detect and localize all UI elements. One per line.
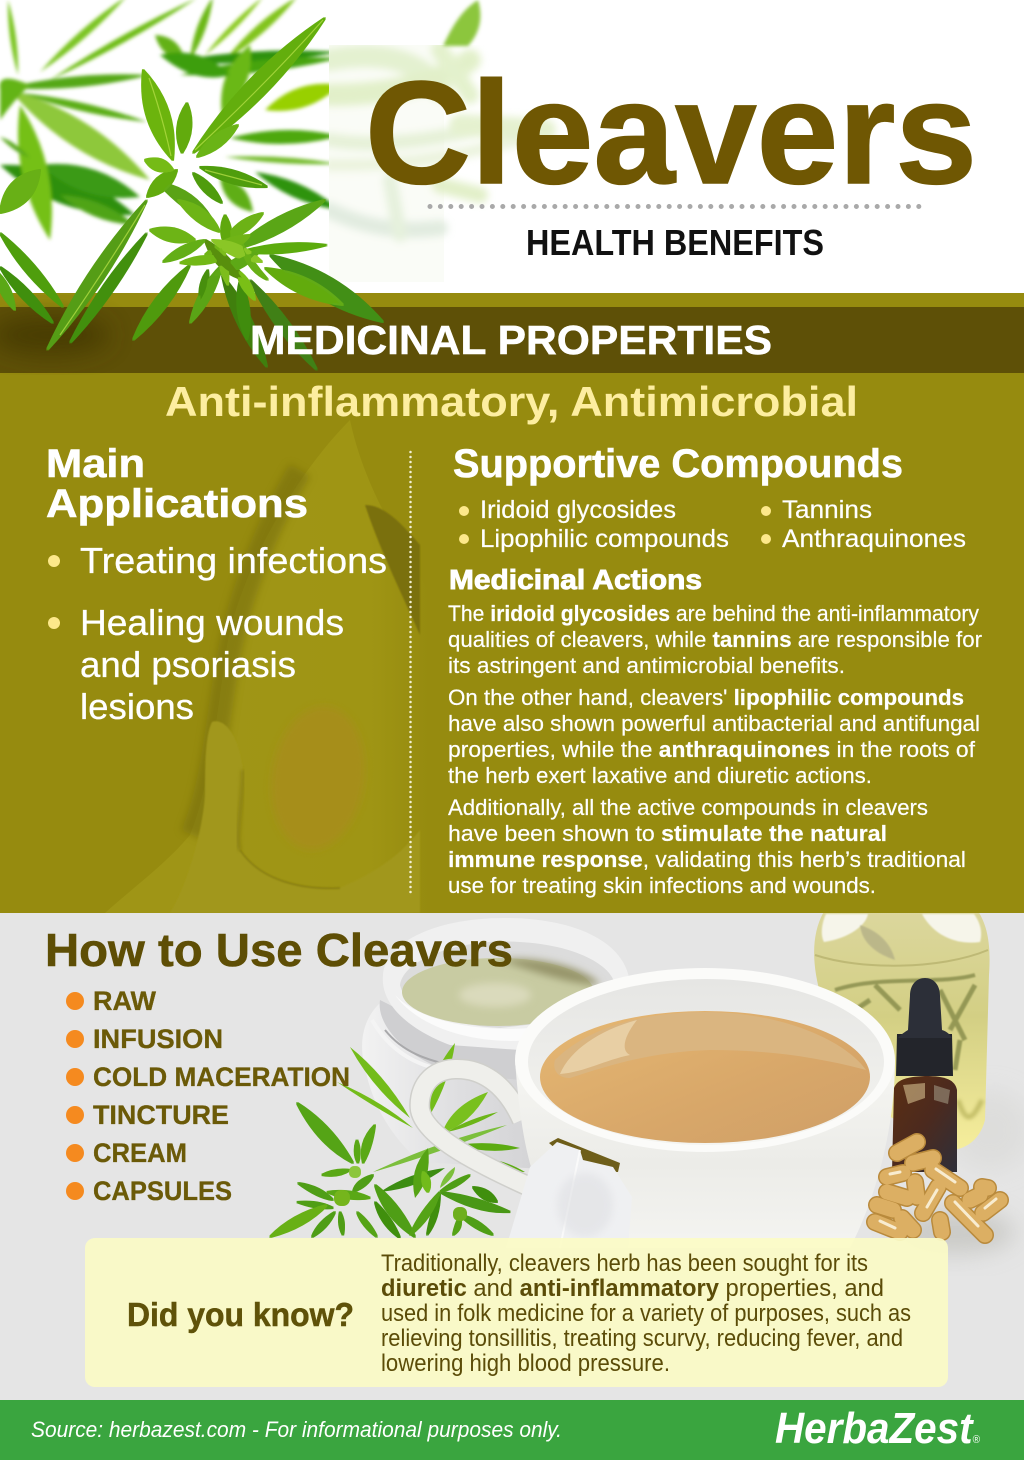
image: cleavers herb xyxy=(0,0,480,370)
image: dropper bottle xyxy=(892,978,957,1172)
item: capsules: CAPSULES xyxy=(93,1176,232,1206)
footer source: Source: herbazest.com - For informational purposes only. xyxy=(31,1417,562,1442)
callout text xyxy=(381,1250,911,1377)
bullet: treating infections: Treating infections xyxy=(80,540,387,581)
callout: did you know xyxy=(85,1238,948,1387)
paragraph: iridoid and tannins: The iridoid glycosides are behind the anti-inflammatory xyxy=(448,601,980,626)
long thin leaves behind handle xyxy=(337,1043,525,1198)
image: tea cup xyxy=(420,968,895,1248)
paragraph: iridoid and tannins xyxy=(448,601,982,678)
paragraph: immune response xyxy=(448,795,966,898)
paragraph: lipophilic and anthraquinones: properties, while the anthraquinones in the roots of xyxy=(448,737,976,762)
compound list: Lipophilic compounds xyxy=(480,525,729,553)
subheading: anti-inflammatory, antimicrobial: Anti-inflammatory, Antimicrobial xyxy=(165,378,858,425)
heading: supportive compounds: Supportive Compounds xyxy=(453,442,903,486)
tea liquid xyxy=(540,1011,870,1143)
right sprig xyxy=(410,1172,510,1235)
item: tincture: TINCTURE xyxy=(93,1100,229,1130)
blurred background leaves xyxy=(0,0,340,240)
capsule highlights xyxy=(880,1169,996,1228)
capsule outlines xyxy=(875,1142,1000,1235)
callout text: Traditionally, cleavers herb has been sought for its xyxy=(381,1250,868,1277)
callout text: lowering high blood pressure. xyxy=(381,1350,670,1377)
paragraph: iridoid and tannins: its astringent and antimicrobial benefits. xyxy=(448,653,845,678)
compound list xyxy=(459,496,966,553)
image: capsules xyxy=(875,1142,1015,1254)
paragraph: lipophilic and anthraquinones: the herb exert laxative and diuretic actions. xyxy=(448,763,872,788)
item: raw xyxy=(66,986,157,1016)
panel: supportive compounds xyxy=(448,442,982,898)
bullet: healing wounds: lesions xyxy=(80,686,194,727)
title: Cleavers: Cleavers xyxy=(365,51,977,214)
dotted divider xyxy=(430,204,920,209)
left sprig xyxy=(270,1103,415,1238)
callout text: used in folk medicine for a variety of purposes, such as xyxy=(381,1300,911,1327)
cup handle xyxy=(420,1069,530,1187)
paragraph: immune response: immune response, validating this herb’s traditional xyxy=(448,847,966,872)
grey section background xyxy=(0,913,1024,1400)
footer logo: HerbaZest: HerbaZest® xyxy=(775,1404,981,1453)
image: bottom herb sprigs xyxy=(270,1043,525,1238)
sharp foreground leaves xyxy=(0,18,383,370)
heading: main applications xyxy=(46,442,308,526)
panel: main applications xyxy=(46,442,387,727)
cup rim xyxy=(515,968,895,1152)
heading: how to use cleavers: How to Use Cleavers xyxy=(45,924,513,976)
heading: main applications: Applications xyxy=(46,482,308,526)
paragraph: iridoid and tannins: qualities of cleavers, while tannins are responsible for xyxy=(448,627,982,652)
cup body xyxy=(515,1060,895,1248)
band: medicinal properties background xyxy=(0,307,1024,373)
compound list: Tannins xyxy=(782,496,872,524)
callout text: diuretic and anti-inflammatory properties, and xyxy=(381,1275,884,1302)
tea bag xyxy=(506,1138,632,1248)
compound list: Anthraquinones xyxy=(782,525,966,553)
subtitle: health benefits: HEALTH BENEFITS xyxy=(526,222,824,263)
paragraph: lipophilic and anthraquinones: On the other hand, cleavers' lipophilic compounds xyxy=(448,685,964,710)
plant shadow on band xyxy=(0,315,110,355)
callout text: relieving tonsillitis, treating scurvy, reducing fever, and xyxy=(381,1325,903,1352)
paragraph: immune response: use for treating skin infections and wounds. xyxy=(448,873,876,898)
header background xyxy=(0,0,1024,293)
callout background xyxy=(85,1238,948,1387)
image: skin wound on arm xyxy=(105,420,428,913)
paragraph: immune response: Additionally, all the active compounds in cleavers xyxy=(448,795,928,820)
bullet: healing wounds: and psoriasis xyxy=(80,644,296,685)
image: pale faded plant behind title xyxy=(329,45,545,282)
bullet: healing wounds: Healing wounds xyxy=(80,602,344,643)
image: cream jar xyxy=(362,918,630,1170)
olive section background xyxy=(0,293,1024,913)
item: cream: CREAM xyxy=(93,1138,187,1168)
stray leaf top right xyxy=(443,0,480,46)
leaf midribs xyxy=(60,20,323,335)
heading: medicinal properties: MEDICINAL PROPERTIES xyxy=(250,317,772,363)
paragraph: lipophilic and anthraquinones: have also shown powerful antibacterial and antifungal xyxy=(448,711,980,736)
callout heading: Did you know? xyxy=(127,1296,354,1333)
item: raw: RAW xyxy=(93,986,157,1016)
list: usage forms xyxy=(66,986,350,1206)
item: cold maceration: COLD MACERATION xyxy=(93,1062,350,1092)
footer bar xyxy=(0,1400,1024,1460)
image: oil bottle with herb xyxy=(814,913,1014,1154)
capsule bodies xyxy=(875,1142,1000,1235)
paragraph: immune response: have been shown to stimulate the natural xyxy=(448,821,887,846)
bullet: healing wounds xyxy=(48,602,344,727)
heading: medicinal actions: Medicinal Actions xyxy=(449,564,702,595)
item: infusion: INFUSION xyxy=(93,1024,223,1054)
dotted column divider xyxy=(409,452,412,893)
paragraph: lipophilic and anthraquinones xyxy=(448,685,980,788)
compound list: Iridoid glycosides xyxy=(480,496,676,524)
heading: main applications: Main xyxy=(46,442,145,486)
